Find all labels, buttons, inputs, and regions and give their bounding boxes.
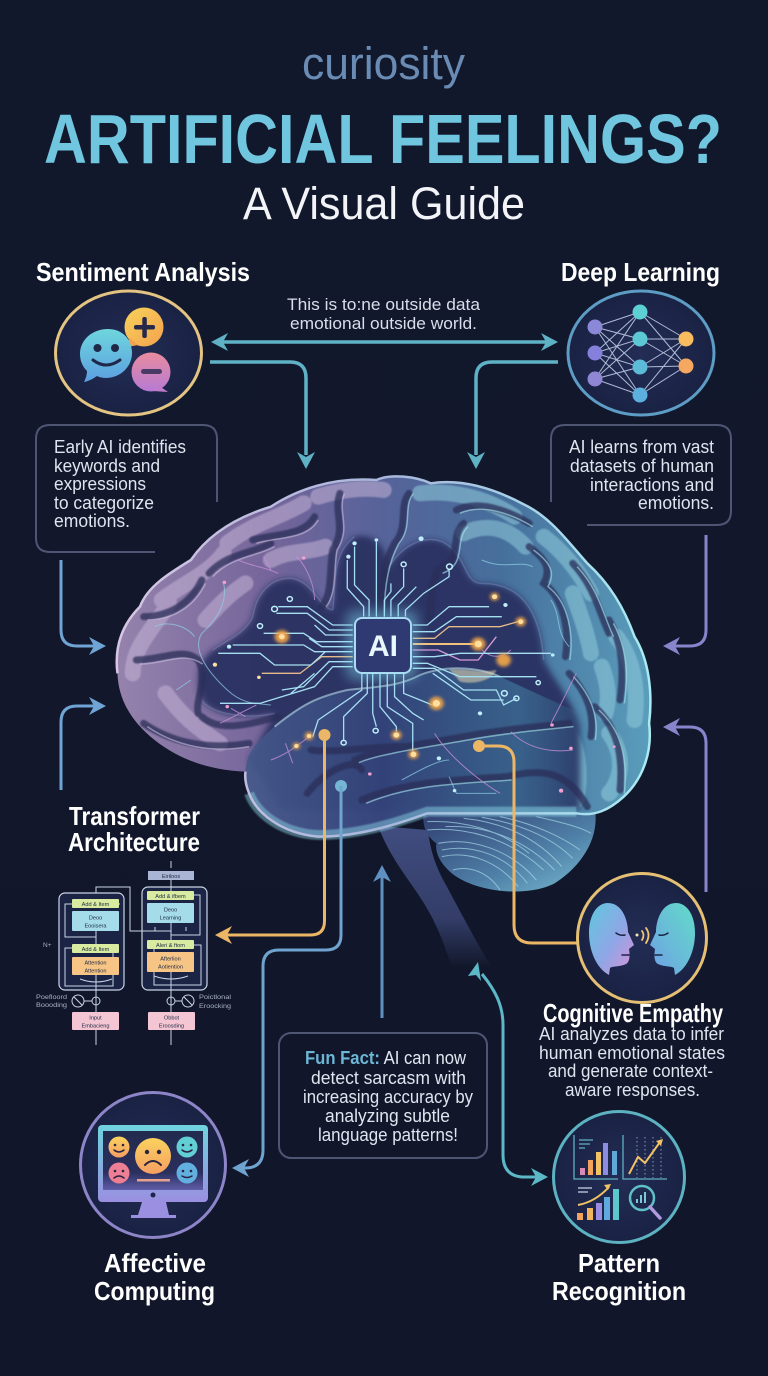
encoder layers: Eooisera bbox=[84, 924, 107, 930]
gyrus highlights bbox=[140, 493, 344, 749]
heading: Transformer Architecture: Architecture bbox=[68, 827, 200, 857]
cerebrum outline bbox=[117, 476, 650, 837]
text: top caption: emotional outside world. bbox=[290, 314, 477, 333]
label: Affective Computing: Affective bbox=[104, 1248, 206, 1278]
panel: AI learns text box: emotions. bbox=[638, 493, 714, 513]
side labels: Boooding bbox=[36, 1002, 67, 1009]
glowing orange nodes bbox=[213, 556, 616, 793]
label: Affective Computing bbox=[94, 1248, 215, 1306]
arrow: right upper bbox=[663, 535, 706, 655]
fold outlines in the dark region bbox=[202, 537, 544, 716]
panel: fun fact: analyzing subtle bbox=[325, 1106, 450, 1126]
circuit nodes bbox=[227, 536, 555, 792]
line: brain to cognitive empathy bbox=[473, 740, 578, 943]
panel: AI learns text box: datasets of human bbox=[570, 456, 714, 476]
output box bbox=[148, 871, 194, 880]
text block: Cognitive Empathy: human emotional states bbox=[539, 1043, 725, 1063]
panel: fun fact: Fun Fact: AI can now bbox=[305, 1048, 467, 1068]
panel: fun fact: detect sarcasm with bbox=[311, 1068, 466, 1088]
encoder layers: Add & Item bbox=[82, 947, 110, 953]
decoder layers: Deoo bbox=[164, 908, 177, 914]
panel: fun fact bbox=[279, 1033, 487, 1158]
label: Pattern Recognition: Pattern bbox=[578, 1248, 660, 1278]
label: Pattern Recognition bbox=[552, 1248, 686, 1306]
diagram: transformer bbox=[36, 861, 232, 1045]
decoder layers: Aotiention bbox=[158, 964, 183, 970]
side labels bbox=[36, 942, 232, 1010]
text block: Cognitive Empathy: AI analyzes data to infer bbox=[539, 1024, 724, 1044]
input embedding boxes: Obbot bbox=[164, 1016, 180, 1022]
panel: fun fact: increasing accuracy by bbox=[303, 1087, 473, 1107]
arrow: brain to transformer bbox=[215, 729, 330, 944]
icon: cognitive empathy faces bbox=[578, 874, 706, 1002]
temporal lower glow bbox=[249, 793, 576, 835]
brain illustration bbox=[117, 476, 650, 968]
lobe crest highlights bbox=[133, 489, 636, 800]
AI chip bbox=[346, 610, 418, 680]
cerebellum bbox=[423, 808, 596, 892]
temporal lobe bbox=[245, 668, 588, 837]
panel: AI learns text box: interactions and bbox=[590, 475, 714, 495]
kicker: curiosity: curiosity bbox=[302, 38, 465, 89]
panel: early AI text box bbox=[36, 425, 217, 552]
brainstem bbox=[378, 826, 492, 968]
side labels: Poictlonal bbox=[199, 994, 232, 1001]
decoder layers: Add & ifbem bbox=[155, 894, 186, 900]
neuron branches bbox=[220, 557, 576, 793]
arrow: brainstem to pattern recognition bbox=[468, 962, 548, 1186]
panel: AI learns text box bbox=[551, 425, 731, 525]
panel: early AI text box: expressions bbox=[54, 474, 146, 494]
input embedding boxes: Eroosding bbox=[159, 1024, 184, 1030]
AI chip: AI bbox=[368, 630, 398, 663]
decoder layers: Afterlion bbox=[160, 956, 181, 962]
panel: early AI text box: keywords and bbox=[54, 456, 160, 476]
icon: sentiment bubbles bbox=[56, 291, 202, 415]
panel: early AI text box: emotions. bbox=[54, 511, 130, 531]
arrow: deep learning to brain bbox=[467, 362, 558, 469]
decoder layers: Aleri & ftom bbox=[156, 943, 185, 949]
icon: neural network bbox=[568, 291, 714, 415]
circuit traces bbox=[218, 542, 551, 752]
input embedding boxes: Embacieng bbox=[82, 1024, 110, 1030]
warm highlight near temporal fold bbox=[449, 669, 496, 683]
panel: early AI text box: Early AI identifies bbox=[54, 437, 186, 457]
icon: pattern recognition charts bbox=[554, 1112, 684, 1242]
brain rim bbox=[117, 476, 650, 837]
arrow: double horizontal bbox=[211, 333, 558, 351]
heading: Sentiment Analysis: Sentiment Analysis bbox=[36, 257, 250, 287]
subtitle: A Visual Guide bbox=[243, 178, 525, 229]
decoder layers: Learning bbox=[160, 916, 181, 922]
text: top caption bbox=[287, 295, 481, 333]
output box: Eiriloos bbox=[162, 874, 180, 880]
label: Affective Computing: Computing bbox=[94, 1276, 215, 1306]
icon: affective computing monitor bbox=[80, 1092, 226, 1238]
heading: Transformer Architecture bbox=[68, 801, 200, 857]
heading: Deep Learning: Deep Learning bbox=[561, 257, 720, 287]
side labels: Eroocking bbox=[199, 1003, 231, 1010]
arrow: left upper bbox=[61, 560, 106, 655]
side labels: Poefloord bbox=[36, 994, 67, 1001]
panel: fun fact: language patterns! bbox=[318, 1125, 458, 1145]
input embedding boxes: Input bbox=[89, 1016, 102, 1022]
arrow: brain to affective computing bbox=[232, 780, 347, 1177]
encoder layers: Deoo bbox=[89, 916, 102, 922]
arrow: fun fact to brain bbox=[373, 865, 391, 1018]
panel: AI learns text box: AI learns from vast bbox=[569, 437, 714, 457]
text: top caption: This is to:ne outside data bbox=[287, 295, 481, 314]
input embedding boxes bbox=[72, 1012, 195, 1030]
sulci folds bbox=[136, 493, 622, 807]
temporal upper highlight bbox=[275, 668, 500, 727]
encoder layers bbox=[72, 899, 119, 975]
encoder layers: Attention bbox=[84, 960, 107, 966]
heading: Transformer Architecture: Transformer bbox=[69, 801, 200, 831]
side labels: N+ bbox=[43, 942, 52, 949]
text block: Cognitive Empathy: aware responses. bbox=[565, 1080, 700, 1100]
text block: Cognitive Empathy: and generate context- bbox=[548, 1061, 713, 1081]
dark inner region bbox=[198, 536, 580, 810]
arrow: sentiment to brain bbox=[210, 362, 315, 469]
decoder layers bbox=[147, 891, 194, 972]
text block: Cognitive Empathy bbox=[539, 998, 725, 1100]
arrow: right lower bbox=[663, 718, 706, 892]
label: Pattern Recognition: Recognition bbox=[552, 1276, 686, 1306]
encoder layers: Attention bbox=[84, 968, 107, 974]
panel: early AI text box: to categorize bbox=[54, 493, 154, 513]
arrow: left lower bbox=[61, 697, 106, 790]
encoder layers: Add & Item bbox=[82, 902, 110, 908]
